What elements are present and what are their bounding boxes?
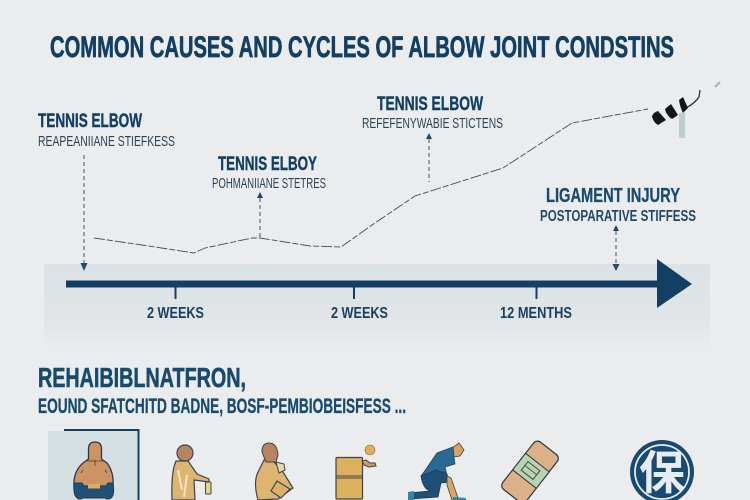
timeline arrow xyxy=(66,259,692,308)
timeline trend line xyxy=(94,109,648,253)
callout: tennis elbow upper: TENNIS ELBOW xyxy=(377,93,483,115)
icon: bandage roll xyxy=(500,439,560,500)
icon: kneeling athlete xyxy=(408,443,466,500)
callout: tennis elbow upper xyxy=(362,93,503,182)
tick: 2 weeks second: 2 WEEKS xyxy=(331,305,388,322)
icon: box and ball xyxy=(336,445,376,499)
tick: 2 weeks second xyxy=(331,286,388,322)
icon: figure holding jar xyxy=(172,445,211,500)
callout: tennis elbow upper: REFEFENYWABIE STICTENS xyxy=(362,115,503,132)
callout: ligament injury xyxy=(540,185,696,271)
icon: windsock xyxy=(652,82,720,138)
callout: ligament injury: LIGAMENT INJURY xyxy=(546,185,680,207)
tick: 12 months xyxy=(500,286,572,322)
timeline band xyxy=(44,264,710,352)
callout: tennis elbow left: REAPEANIIANE STIEFKESS xyxy=(38,133,175,150)
rehabilitation subheading: EOUND SFATCHITD BADNE, BOSF-PEMBIOBEISFESS ... xyxy=(38,395,406,418)
icon: back figure panel xyxy=(48,430,139,500)
callout: tennis elbow left: TENNIS ELBOW xyxy=(38,110,142,132)
callout: tennis elboy middle: POHMANIIANE STETRES xyxy=(212,175,326,192)
icon: figure stretching arm xyxy=(256,443,293,500)
rehabilitation heading: REHAIBIBLNATFRON, xyxy=(38,362,246,393)
tick: 12 months: 12 MENTHS xyxy=(500,305,572,322)
tick: 2 weeks: 2 WEEKS xyxy=(147,305,204,322)
tick: 2 weeks xyxy=(147,286,204,322)
callout: tennis elboy middle: TENNIS ELBOY xyxy=(218,153,317,175)
callout: tennis elbow left xyxy=(38,110,175,271)
callout: ligament injury: POSTOPARATIVE STIFFESS xyxy=(540,208,696,225)
callout: tennis elboy middle xyxy=(212,153,326,240)
